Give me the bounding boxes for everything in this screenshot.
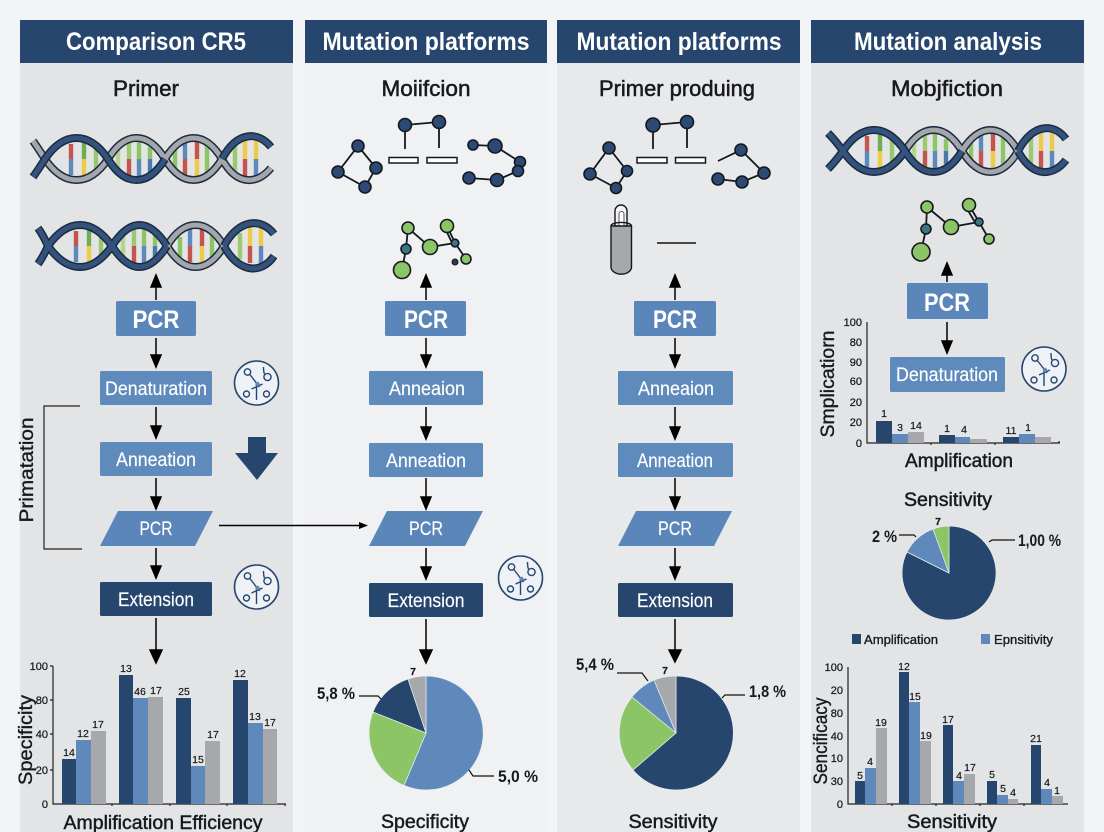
flow panel 3 [618, 275, 733, 662]
axis labels [825, 662, 1068, 811]
value labels: 17 [964, 762, 976, 774]
value labels: 1 [1054, 785, 1060, 797]
box: PCR [116, 301, 196, 336]
panel header: mutation analysis: Mutation analysis [854, 28, 1042, 56]
value labels: 11 [1006, 425, 1017, 437]
value labels: 3 [897, 422, 903, 434]
axis labels [30, 661, 286, 811]
value labels: 4 [867, 756, 873, 768]
arrow: panel 1 to panel 2 [219, 524, 360, 526]
icon: big down arrow [235, 437, 278, 480]
box: Extension [369, 583, 483, 617]
panel: mutation platforms B [557, 20, 800, 832]
value labels: 4 [1010, 787, 1016, 799]
x axis title: Amplification [905, 451, 1013, 472]
box: PCR parallelogram: PCR [140, 519, 172, 540]
heading: Primer produing: Primer produing [599, 76, 755, 101]
panel header: mutation platforms A: Mutation platforms [322, 28, 530, 56]
arrow: up to helix [151, 275, 161, 300]
box: PCR parallelogram [369, 511, 483, 546]
value labels [881, 408, 1031, 437]
box: Anneaion [369, 371, 483, 405]
icon: DNA helix 2 [38, 223, 274, 268]
bars [855, 672, 1063, 804]
value labels: 15 [192, 754, 204, 766]
arrow [670, 275, 680, 300]
box: PCR parallelogram: PCR [658, 519, 692, 540]
arrow [420, 619, 432, 663]
box: Anneation [369, 443, 483, 477]
panel: comparison CR5 [20, 20, 293, 832]
icon: DNA helix 1 [33, 136, 271, 180]
icon: circuit circle 2 [234, 565, 278, 609]
arrow [670, 478, 680, 509]
box: Denaturation: Denaturation [105, 379, 207, 400]
bar chart: Amplification, panel 4 [818, 317, 1060, 472]
heading: Mobjfiction: Mobjfiction [891, 76, 1003, 101]
panel header: comparison CR5 [20, 20, 293, 63]
arrow [942, 263, 952, 282]
box: PCR parallelogram [618, 511, 732, 546]
panel header: comparison CR5: Comparison CR5 [66, 28, 246, 56]
flow panel 4 [890, 263, 1005, 392]
value labels: 12 [898, 661, 910, 673]
box: PCR: PCR [924, 289, 970, 317]
legend: Epnsitivity [994, 632, 1053, 647]
callout: 5,8 %: 5,8 % [317, 684, 355, 703]
heading: Moiifcion: Moiifcion [382, 76, 470, 101]
value labels: 12 [77, 728, 89, 740]
y axis title: Sencificacy [811, 697, 832, 784]
arrow [421, 275, 431, 300]
icon: molecule network, panel 2 [332, 116, 526, 193]
callout: 1,00 %: 1,00 % [1018, 531, 1061, 550]
callout: 7: 7 [662, 665, 668, 677]
box: Anneaion: Anneaion [638, 379, 714, 400]
axis labels: 40 [36, 729, 48, 741]
box: PCR: PCR [404, 306, 448, 334]
bars [876, 421, 1051, 443]
bar chart: Amplification Efficiency [16, 661, 286, 832]
callout: 5,4 %: 5,4 % [576, 655, 614, 674]
heading: Primer: Primer [113, 76, 179, 101]
box: Anneation: Anneation [637, 451, 713, 472]
value labels: 21 [1030, 733, 1042, 745]
axis labels: 20 [850, 417, 862, 429]
callout: 7: 7 [410, 666, 416, 678]
arrow [421, 548, 431, 579]
axis labels: 0 [837, 799, 843, 811]
pie chart: Sensitivity, panel 4 [872, 516, 1061, 620]
callout: 1,00 % [989, 531, 1061, 550]
value labels [857, 661, 1060, 799]
heading: Sensitivity, panel 4: Sensitivity [904, 490, 993, 511]
value labels: 46 [134, 686, 146, 698]
box: Extension [618, 583, 733, 617]
value labels: 17 [264, 717, 276, 729]
value labels: 4 [956, 770, 962, 782]
arrowhead: panel 1 to panel 2 [359, 522, 368, 529]
value labels: 14 [63, 747, 75, 759]
value labels: 17 [207, 729, 219, 741]
y axis title: Specificity [16, 694, 37, 785]
axis labels: 100 [844, 317, 862, 329]
box: Extension [100, 582, 212, 616]
arrow [150, 618, 162, 663]
axis labels: 0 [42, 799, 48, 811]
panel header: mutation platforms B [557, 20, 800, 63]
box: Denaturation: Denaturation [896, 365, 998, 386]
axis labels: 100 [825, 662, 843, 674]
axis labels: 40 [831, 731, 843, 743]
arrow [942, 322, 952, 353]
axis labels: 100 [30, 661, 48, 673]
flow panel 2 [369, 275, 483, 663]
arrow [151, 478, 161, 509]
box: Anneation: Anneation [386, 451, 466, 472]
arrow [421, 407, 431, 439]
value labels: 1 [1025, 422, 1031, 434]
axis labels: 80 [850, 337, 862, 349]
legend: Amplification [864, 632, 938, 647]
panel header: mutation platforms B: Mutation platforms [576, 28, 782, 56]
arrow [151, 548, 161, 578]
box: Extension: Extension [637, 591, 713, 612]
bracket and label: Primatation [17, 406, 82, 549]
axis labels: 0 [856, 438, 862, 450]
callout: 1,8 % [722, 682, 786, 701]
bars [62, 675, 277, 804]
panel: mutation analysis [811, 20, 1084, 832]
callout: 5,0 %: 5,0 % [498, 767, 538, 786]
value labels: 17 [942, 714, 954, 726]
callout: 2 % [872, 527, 916, 546]
axis labels: 90 [850, 357, 862, 369]
value labels: 1 [881, 408, 887, 420]
icon: DNA helix 3 [828, 128, 1066, 172]
pie chart: Specificity [317, 666, 538, 832]
value labels: 5 [1000, 783, 1006, 795]
dash line beside test tube [657, 242, 696, 244]
box: Extension: Extension [118, 590, 194, 611]
box: PCR [385, 301, 466, 336]
callout: 1,8 %: 1,8 % [749, 682, 786, 701]
y axis title: Smplicatiorn [818, 330, 839, 438]
arrow [670, 338, 680, 367]
panel header: mutation platforms A [305, 20, 547, 63]
box: PCR parallelogram [100, 511, 213, 546]
value labels: 4 [961, 424, 967, 436]
icon: test tube [611, 205, 632, 274]
legend [852, 632, 1053, 647]
arrow [151, 407, 161, 438]
box: PCR parallelogram: PCR [409, 519, 443, 540]
arrow [421, 338, 431, 367]
box: Anneaion [618, 371, 733, 405]
callout: 5,4 % [576, 655, 648, 681]
axis labels: 30 [831, 776, 843, 788]
value labels: 5 [857, 770, 863, 782]
axis labels: 60 [850, 376, 862, 388]
axis labels: 10 [831, 753, 843, 765]
icon: circuit circle 4 [1022, 347, 1066, 391]
panel: mutation platforms A [305, 20, 547, 832]
arrow [421, 478, 431, 509]
arrow [151, 338, 161, 367]
icon: green molecule, panel 2 [394, 220, 471, 278]
value labels: 1 [944, 423, 950, 435]
axis labels: 20 [831, 685, 843, 697]
value labels: 19 [875, 717, 887, 729]
axis labels: 80 [36, 695, 48, 707]
box: PCR: PCR [653, 306, 697, 334]
value labels: 13 [249, 711, 261, 723]
arrow [670, 548, 680, 579]
flow panel 1 [100, 275, 213, 663]
axis labels: 20 [36, 765, 48, 777]
value labels: 17 [92, 719, 104, 731]
box: PCR: PCR [132, 306, 180, 334]
callout: 2 %: 2 % [872, 527, 897, 546]
value labels: 13 [120, 663, 132, 675]
bar chart: Sensitivity, panel 4 [811, 661, 1068, 832]
value labels [63, 663, 276, 766]
box: Anneation [618, 443, 733, 477]
arrow [670, 407, 680, 439]
icon: circuit circle 1 [234, 361, 278, 405]
box: Denaturation [100, 371, 212, 405]
value labels: 17 [150, 685, 162, 697]
value labels: 25 [178, 686, 190, 698]
callout: 5,0 % [469, 767, 538, 786]
box: Anneaion: Anneaion [389, 379, 465, 400]
value labels: 12 [234, 668, 246, 680]
value labels: 4 [1044, 777, 1050, 789]
axis labels: 20 [850, 397, 862, 409]
box: Extension: Extension [388, 591, 464, 612]
value labels: 14 [910, 420, 922, 432]
box: Anneation [100, 442, 212, 476]
value labels: 19 [920, 730, 932, 742]
icon: circuit circle 3 [498, 556, 542, 600]
pie chart: Sensitivity [576, 655, 786, 832]
icon: molecule network, panel 3 [584, 116, 770, 194]
value labels: 15 [909, 691, 921, 703]
box: Anneation: Anneation [116, 450, 196, 471]
panel header: mutation analysis [811, 20, 1084, 63]
bracket and label: Primatation: Primatation [17, 417, 38, 523]
callout: 5,8 % [317, 684, 381, 703]
callout: 7: 7 [935, 516, 941, 528]
icon: green molecule, panel 4 [912, 198, 994, 261]
value labels: 5 [989, 769, 995, 781]
axis labels: 80 [831, 708, 843, 720]
box: PCR [634, 301, 716, 336]
axis labels [844, 317, 1060, 450]
arrow [669, 619, 681, 662]
